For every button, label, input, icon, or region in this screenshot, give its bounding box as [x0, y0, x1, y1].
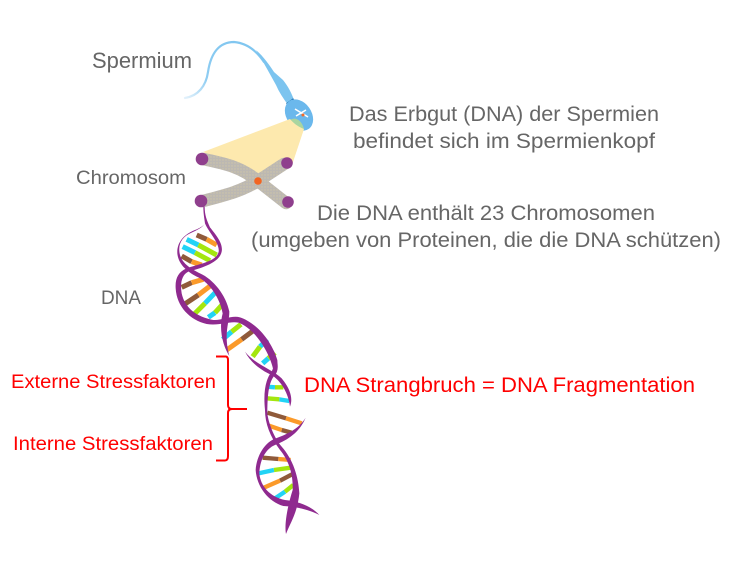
label: Spermium: Spermium	[92, 48, 192, 73]
chromosome	[195, 153, 294, 208]
sperm illustration	[185, 42, 319, 136]
text: Erbgut: Das Erbgut (DNA) der Spermien	[349, 102, 659, 126]
label: DNA: DNA	[101, 288, 141, 309]
label: Chromosom: Chromosom	[76, 168, 186, 189]
sperm midpiece	[256, 50, 294, 105]
text: Erbgut	[349, 102, 659, 153]
text: Chromosomen: Die DNA enthält 23 Chromosomen	[317, 201, 655, 225]
callout: DNA Strangbruch: DNA Strangbruch = DNA Fragmentation	[304, 373, 695, 397]
sperm head	[279, 94, 319, 136]
lower base pairs	[258, 387, 302, 499]
DNA double helix	[176, 207, 319, 534]
upper purple strands	[176, 207, 277, 370]
label: Interne Stressfaktoren: Interne Stressfaktoren	[13, 434, 213, 455]
yellow projection beam	[203, 119, 304, 174]
chromosome tips	[195, 153, 294, 208]
text: Chromosomen	[251, 201, 721, 252]
upper base pairs	[182, 235, 275, 363]
centromere	[254, 177, 262, 185]
chromosome arms	[203, 159, 286, 203]
lower purple strands	[245, 350, 319, 534]
bracket	[216, 356, 247, 460]
label: Externe Stressfaktoren: Externe Stressfaktoren	[11, 372, 216, 393]
sperm neck	[287, 100, 294, 104]
text: Erbgut: befindet sich im Spermienkopf	[353, 129, 655, 153]
sperm tail	[185, 42, 264, 98]
text: Chromosomen: (umgeben von Proteinen, die die DNA schützen)	[251, 228, 721, 252]
